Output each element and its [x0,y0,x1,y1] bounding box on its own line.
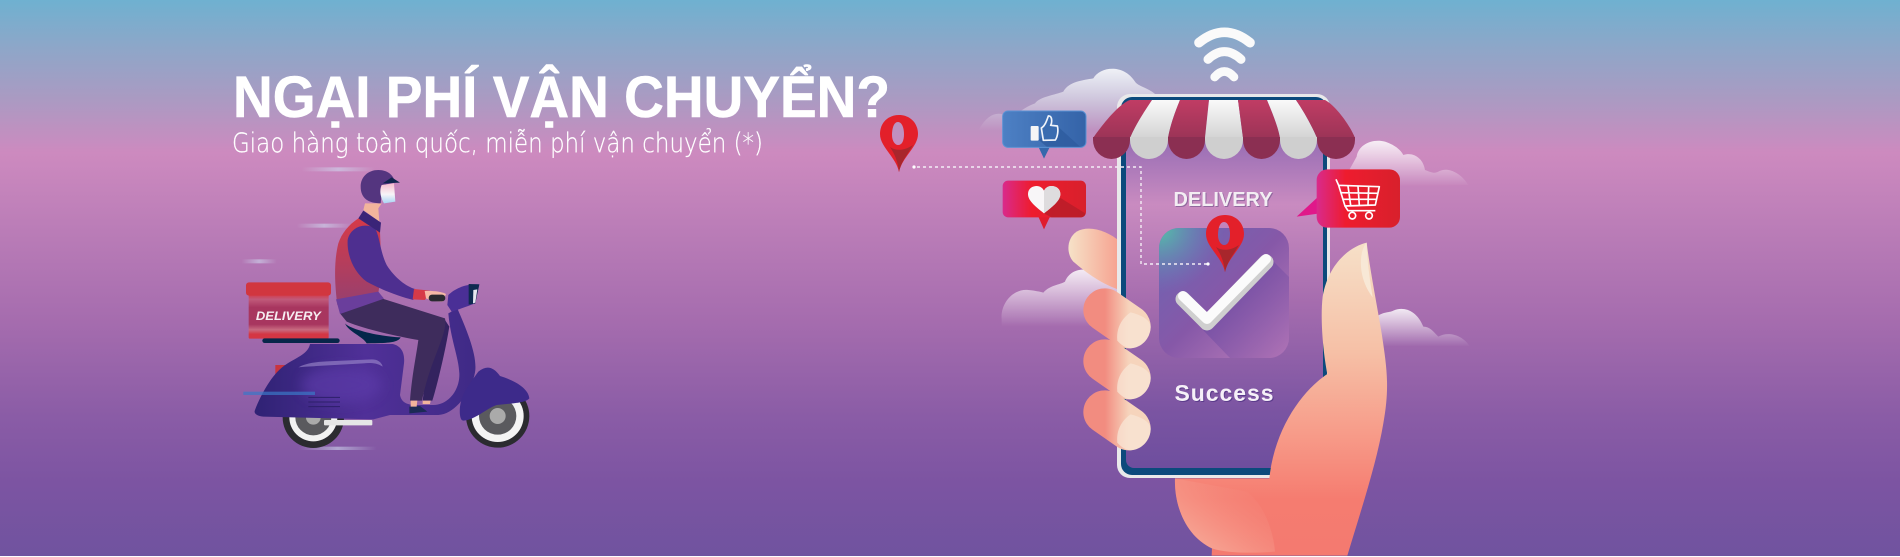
belt [336,292,384,314]
vest [335,218,382,305]
hand [425,291,446,302]
subtitle: Giao hàng toàn quốc, miễn phí vận chuyển (*) [232,128,763,159]
seat [345,323,401,343]
right upper cloud [1340,141,1468,187]
exhaust pipe [324,420,372,425]
front fender [460,368,529,421]
blue streak [243,392,315,395]
tail light [275,365,285,375]
dotted route lines [912,165,1210,266]
phone screen [1126,102,1323,468]
awning [1093,100,1355,159]
wifi icon [1199,32,1250,77]
front leg and trousers [340,298,445,401]
title: NGẠI PHÍ VẬN CHUYỂN? [233,65,890,130]
like bubble [1003,111,1086,159]
cart bubble [1297,169,1400,228]
index finger [1068,229,1120,290]
shoe [409,406,427,413]
check shadow [1203,261,1289,358]
palm and thumb [1175,243,1387,556]
finger nails [1117,312,1151,450]
hand [1105,243,1387,556]
phone frame [1117,94,1330,478]
awning scallops [1093,137,1355,159]
smartphone [1117,94,1330,478]
location pin, phone [1206,215,1244,272]
grip [429,295,445,301]
delivery label: DELIVERY [1174,188,1273,211]
top icons [1003,111,1400,229]
arm [348,226,415,300]
location pin, left [880,115,918,172]
lower clouds, behind hand [1002,229,1470,347]
palm highlight [1175,478,1275,553]
body panel glow [302,367,382,403]
cuff [413,289,430,300]
upper clouds and wifi [978,32,1468,187]
delivery scooter rider [242,167,529,450]
headlight lens [473,289,477,303]
phone bezel [1121,97,1327,475]
scooter body [255,308,475,419]
thumb nail [1361,243,1373,297]
neck [363,203,382,222]
success label: Success [1176,381,1274,407]
left lower cloud [1002,270,1120,327]
helmet brim [383,177,400,183]
bottom edge [0,556,1900,557]
app tile [1159,228,1289,358]
body panel highlight [298,359,383,367]
headlight [469,284,479,305]
visor [380,183,395,203]
check mark [1183,259,1266,323]
front wheel [466,384,529,448]
upper stripes [1093,100,1355,138]
helmet [361,170,395,203]
fingers [1105,310,1129,429]
rear leg [423,320,449,401]
left upper cloud [978,69,1160,131]
right lower cloud [1373,309,1470,347]
delivery box: DELIVERY [256,309,322,323]
vents [308,397,340,407]
delivery label: DELIVERY [1174,189,1274,212]
success label: Success [1174,380,1274,406]
collar [358,211,381,233]
heart bubble [1003,181,1086,229]
ankle [411,401,431,407]
speed lines [242,167,377,450]
delivery box [246,282,340,343]
handlebar head [447,284,479,312]
rear wheel [283,387,344,448]
